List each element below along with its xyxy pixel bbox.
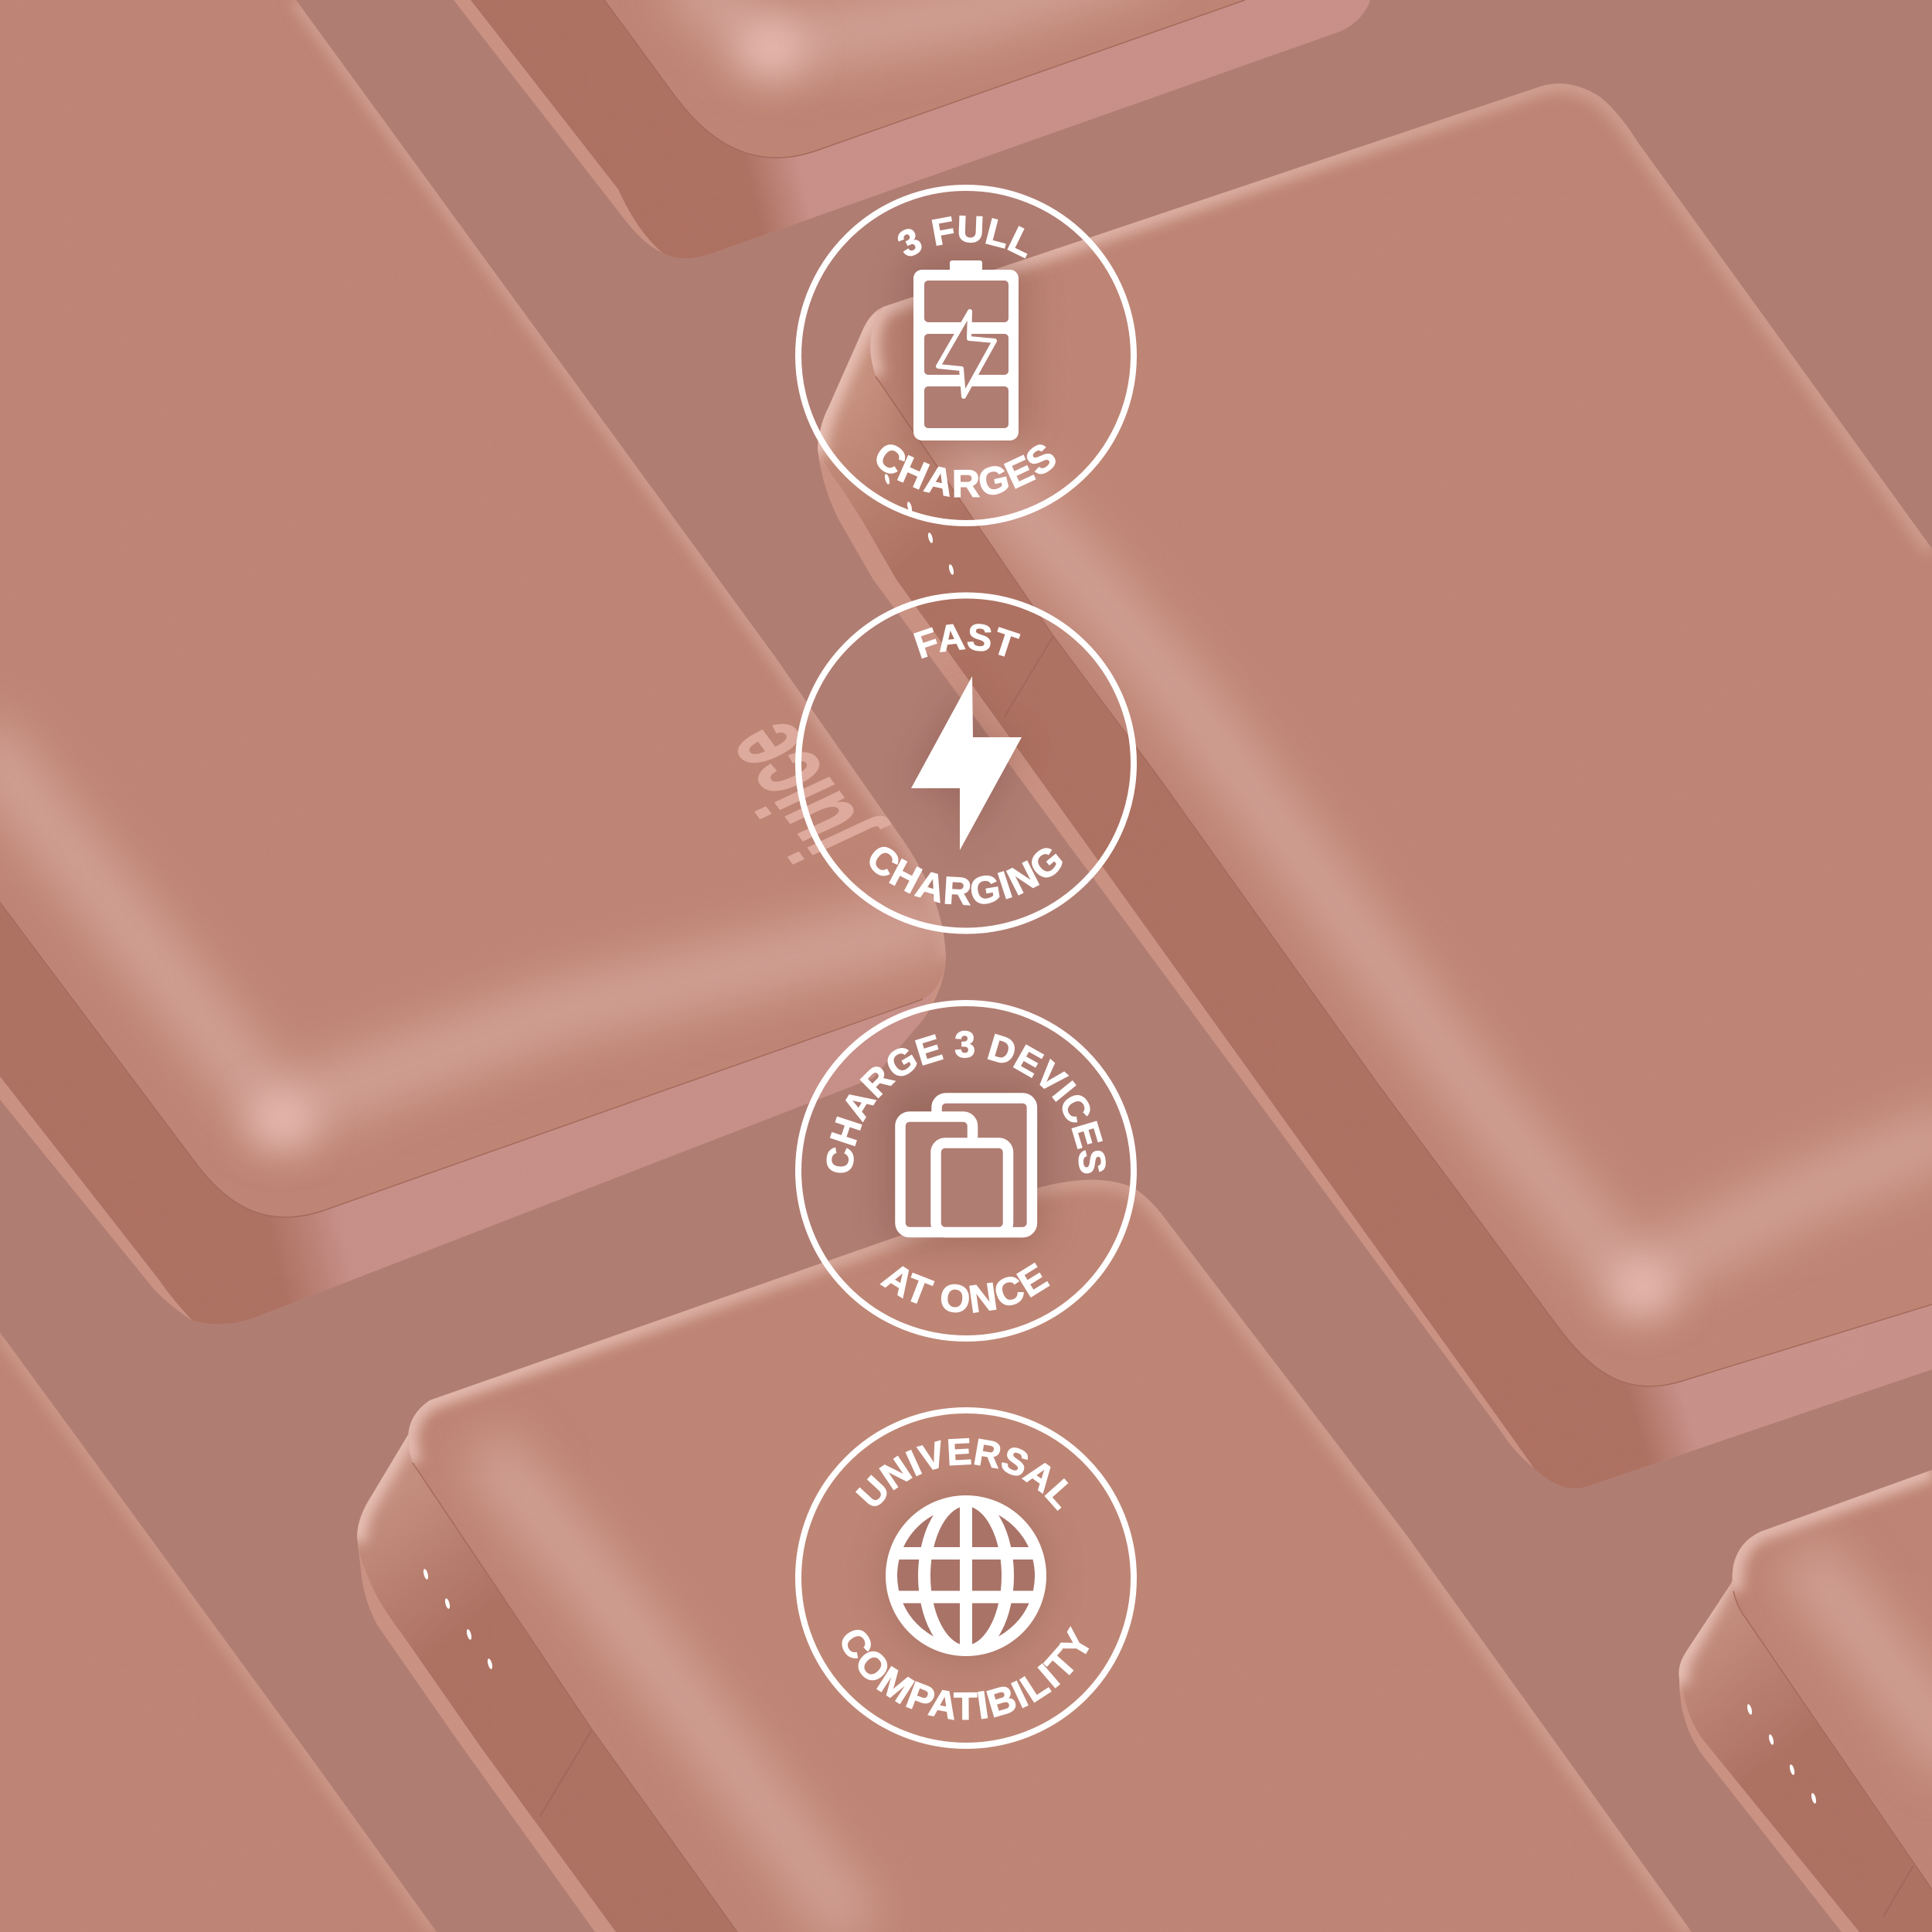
LED dots — [423, 1569, 493, 1669]
seam line — [876, 376, 1932, 1386]
seam line — [0, 903, 923, 1217]
badge: 3 full charges — [798, 188, 1134, 523]
seam line — [604, 0, 1245, 158]
LED dots — [1747, 1704, 1817, 1804]
power bank: bottom centre — [357, 1180, 1692, 1932]
divider seam — [540, 1730, 592, 1816]
badge: charge 3 devices at once — [798, 1003, 1134, 1338]
juice logo: juice — [694, 707, 892, 876]
icon: lightning bolt — [911, 676, 1022, 850]
divider seam — [1005, 636, 1053, 716]
label: fast: FAST — [913, 624, 1020, 658]
label: 3 full: 3 FULL — [898, 215, 1028, 258]
power bank: top — [454, 0, 1370, 258]
label: at once: AT ONCE — [876, 1254, 1056, 1321]
divider seam — [1883, 1866, 1913, 1917]
label: charges: CHARGES — [876, 444, 1056, 498]
badge: universal compatibility — [798, 1410, 1134, 1746]
power bank: large right — [818, 83, 1932, 1488]
power bank: bottom right — [1679, 1470, 1932, 1932]
icon: battery — [913, 260, 1019, 440]
label: charge 3 devices: CHARGE 3 DEVICES — [819, 1025, 1113, 1175]
power bank: bottom-left face — [0, 1332, 437, 1932]
label: universal: UNIVERSAL — [849, 1431, 1083, 1517]
label: compatibility: COMPATIBILITY — [830, 1621, 1102, 1728]
seam line — [413, 1463, 737, 1932]
icon: globe — [886, 1495, 1046, 1656]
icon: three devices — [900, 1098, 1032, 1233]
power bank: large left — [0, 0, 951, 1324]
label: charging: CHARGING — [869, 847, 1063, 906]
seam line — [1733, 1591, 1932, 1889]
badge: fast charging — [798, 595, 1134, 930]
LED dots — [884, 474, 954, 575]
